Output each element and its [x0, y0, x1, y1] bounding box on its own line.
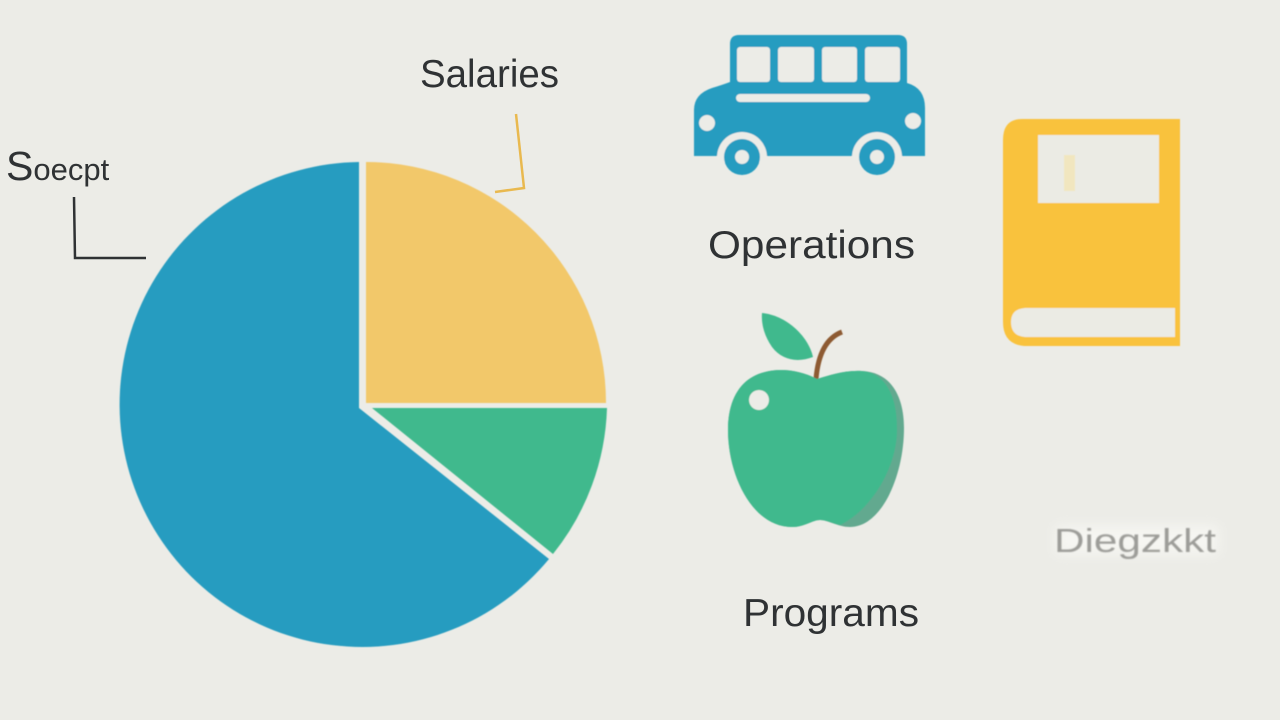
label: Soecpt: Soecpt	[6, 143, 110, 189]
apple body shadow	[728, 370, 904, 527]
pie slice: green	[372, 408, 607, 554]
pie slice: blue	[120, 162, 549, 647]
leader line: Salaries	[495, 114, 524, 192]
apple highlight	[749, 390, 769, 410]
pie slice: salaries yellow	[366, 162, 606, 403]
apple leaf	[762, 313, 813, 360]
label: Operations: Operations	[708, 224, 915, 267]
apple stem	[816, 332, 842, 379]
pie chart	[120, 162, 607, 647]
apple body	[728, 370, 897, 527]
garbled faded label: Diegzkkt	[1054, 522, 1216, 559]
icon: apple	[728, 313, 904, 527]
label: Salaries: Salaries	[420, 53, 559, 96]
icon: bus	[694, 35, 925, 175]
leader line: Soecpt	[74, 197, 146, 258]
label: Programs: Programs	[743, 592, 919, 635]
icon: book	[1003, 119, 1180, 346]
